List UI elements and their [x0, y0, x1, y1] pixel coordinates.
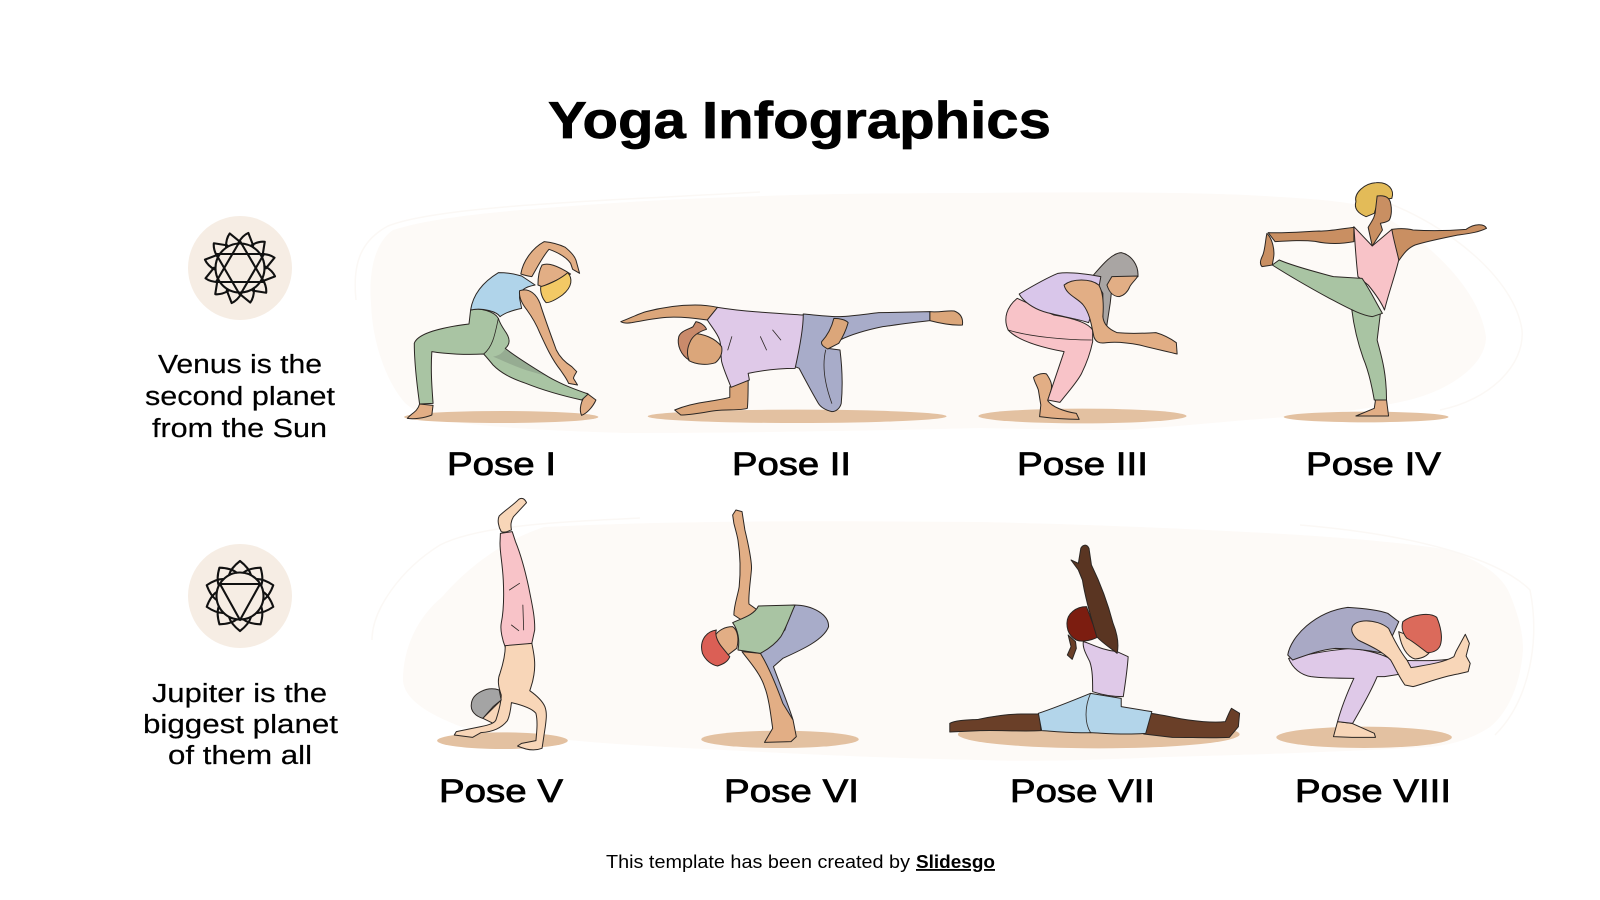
icon circle with solar chakra symbol	[188, 544, 292, 648]
text block: Venus	[145, 351, 335, 443]
text block: Jupiter	[143, 680, 338, 770]
figure: pose VI	[701, 510, 859, 748]
label: Pose III: Pose III	[1017, 446, 1148, 482]
figure: pose VIII	[1276, 607, 1470, 748]
label: Pose VI: Pose VI	[724, 773, 859, 809]
label: Pose VII: Pose VII	[1010, 773, 1155, 809]
figure: pose VII	[950, 545, 1240, 748]
label: Pose II: Pose II	[732, 446, 851, 482]
figure: pose I	[404, 242, 598, 423]
text block: Venus: Venus is the	[158, 351, 322, 379]
text block: Jupiter: biggest planet	[143, 711, 338, 739]
footer credit: Slidesgo	[916, 851, 995, 872]
figure: pose III	[978, 253, 1187, 423]
icon circle with heart chakra symbol	[188, 216, 292, 320]
figure: pose IV	[1260, 183, 1487, 422]
label: Pose VIII: Pose VIII	[1295, 773, 1451, 809]
figure: pose V	[437, 498, 568, 750]
figure: pose II	[621, 305, 963, 423]
background blob: row 1	[355, 192, 1522, 433]
text block: Jupiter: Jupiter is the	[152, 680, 327, 708]
title: Yoga Infographics	[548, 92, 1051, 150]
text block: Venus: second planet	[145, 383, 335, 411]
background blob: row 2	[372, 518, 1534, 761]
text block: Venus: from the Sun	[152, 415, 327, 443]
label: Pose IV: Pose IV	[1306, 446, 1441, 482]
label: Pose V: Pose V	[439, 773, 563, 809]
footer credit: This template has been created by	[606, 851, 911, 872]
text block: Jupiter: of them all	[168, 742, 312, 770]
label: Pose I: Pose I	[447, 446, 556, 482]
